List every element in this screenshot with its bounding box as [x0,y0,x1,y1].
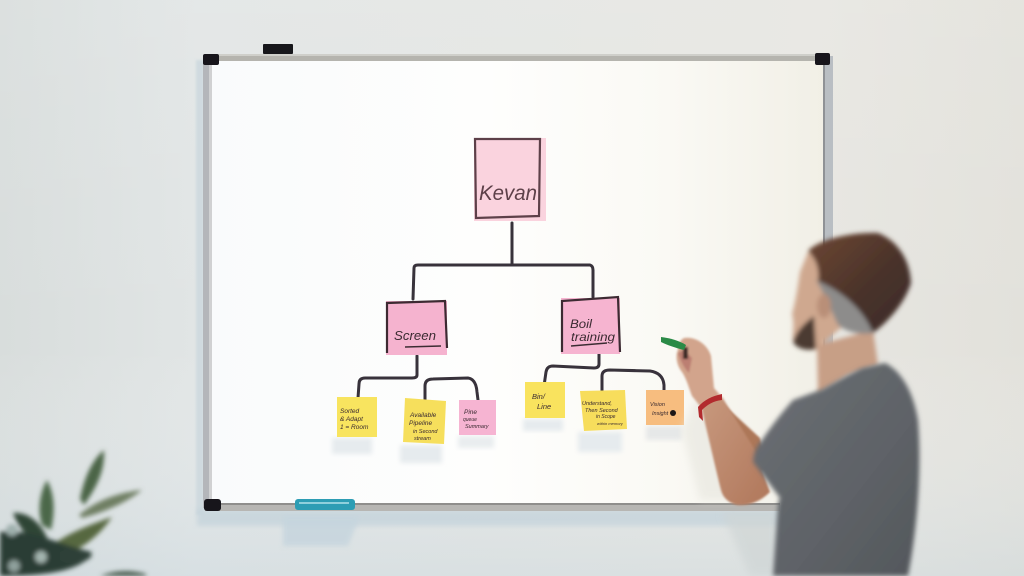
marker tray pen [295,499,355,510]
whiteboard [203,44,833,511]
ear [817,294,831,318]
beard [793,316,816,350]
faded hair side [816,280,875,334]
red wristband [698,394,722,421]
sticky note: yellow 4: in Scope [596,414,616,420]
far arm [722,403,768,470]
sticky note: yellow 4: within memory [597,421,624,426]
frame right [823,56,833,368]
sticky note: yellow 1: Sorted [340,408,360,415]
sticky note: pink: queue [463,417,477,423]
sticky note: yellow 2: Available [409,412,437,419]
corner clips [203,53,830,511]
sticky note: orange: Insight [652,411,669,417]
person [661,233,919,576]
sticky note: yellow 2: stream [414,436,431,442]
sticky note: yellow 3 [523,382,565,431]
sticky note: yellow 3: Line [537,402,551,411]
green marker [661,337,686,350]
hand [677,338,720,406]
sticky note: pink [458,400,496,448]
person shadow on board [682,400,745,500]
root node: Kevan: Kevan [479,182,537,205]
sticky note: yellow 4: Understand, [582,401,612,407]
sticky note: yellow 1: 1 = Room [340,424,369,431]
sticky note: yellow 1 [332,397,377,454]
sticky note: orange [646,390,684,440]
connector lines [358,223,664,402]
neck [817,330,878,395]
node: Boil training: training [571,332,616,344]
top magnet [263,44,293,54]
potted plant [0,450,146,576]
root node: Kevan [474,138,546,221]
board surface [210,60,825,505]
frame left [203,56,212,508]
sticky note: yellow 1: & Adapt [340,416,364,423]
sticky note: yellow 2 [400,398,446,463]
node: Screen [386,301,447,355]
sticky note: orange: Vision [650,402,665,408]
node: Screen: Screen [394,329,436,343]
sticky note: pink: Pine [464,409,477,416]
frame top [205,54,830,61]
sticky note: yellow 2: in Second [413,429,438,435]
sticky note: yellow 2: Pipeline [409,420,433,427]
node: Boil training: Boil [570,319,592,331]
face [792,252,850,350]
head and neck [792,233,911,395]
near arm [700,397,770,505]
frame bottom [205,503,780,511]
hair [808,233,911,333]
node: Boil training [561,297,620,354]
org chart [332,138,684,463]
sticky note: pink: Summary [465,424,490,430]
sticky note: yellow 4: Then Second [585,408,619,414]
sticky note: yellow 3: Bin/ [532,392,546,401]
t-shirt [753,363,919,576]
sticky note: yellow 4 [578,390,627,452]
